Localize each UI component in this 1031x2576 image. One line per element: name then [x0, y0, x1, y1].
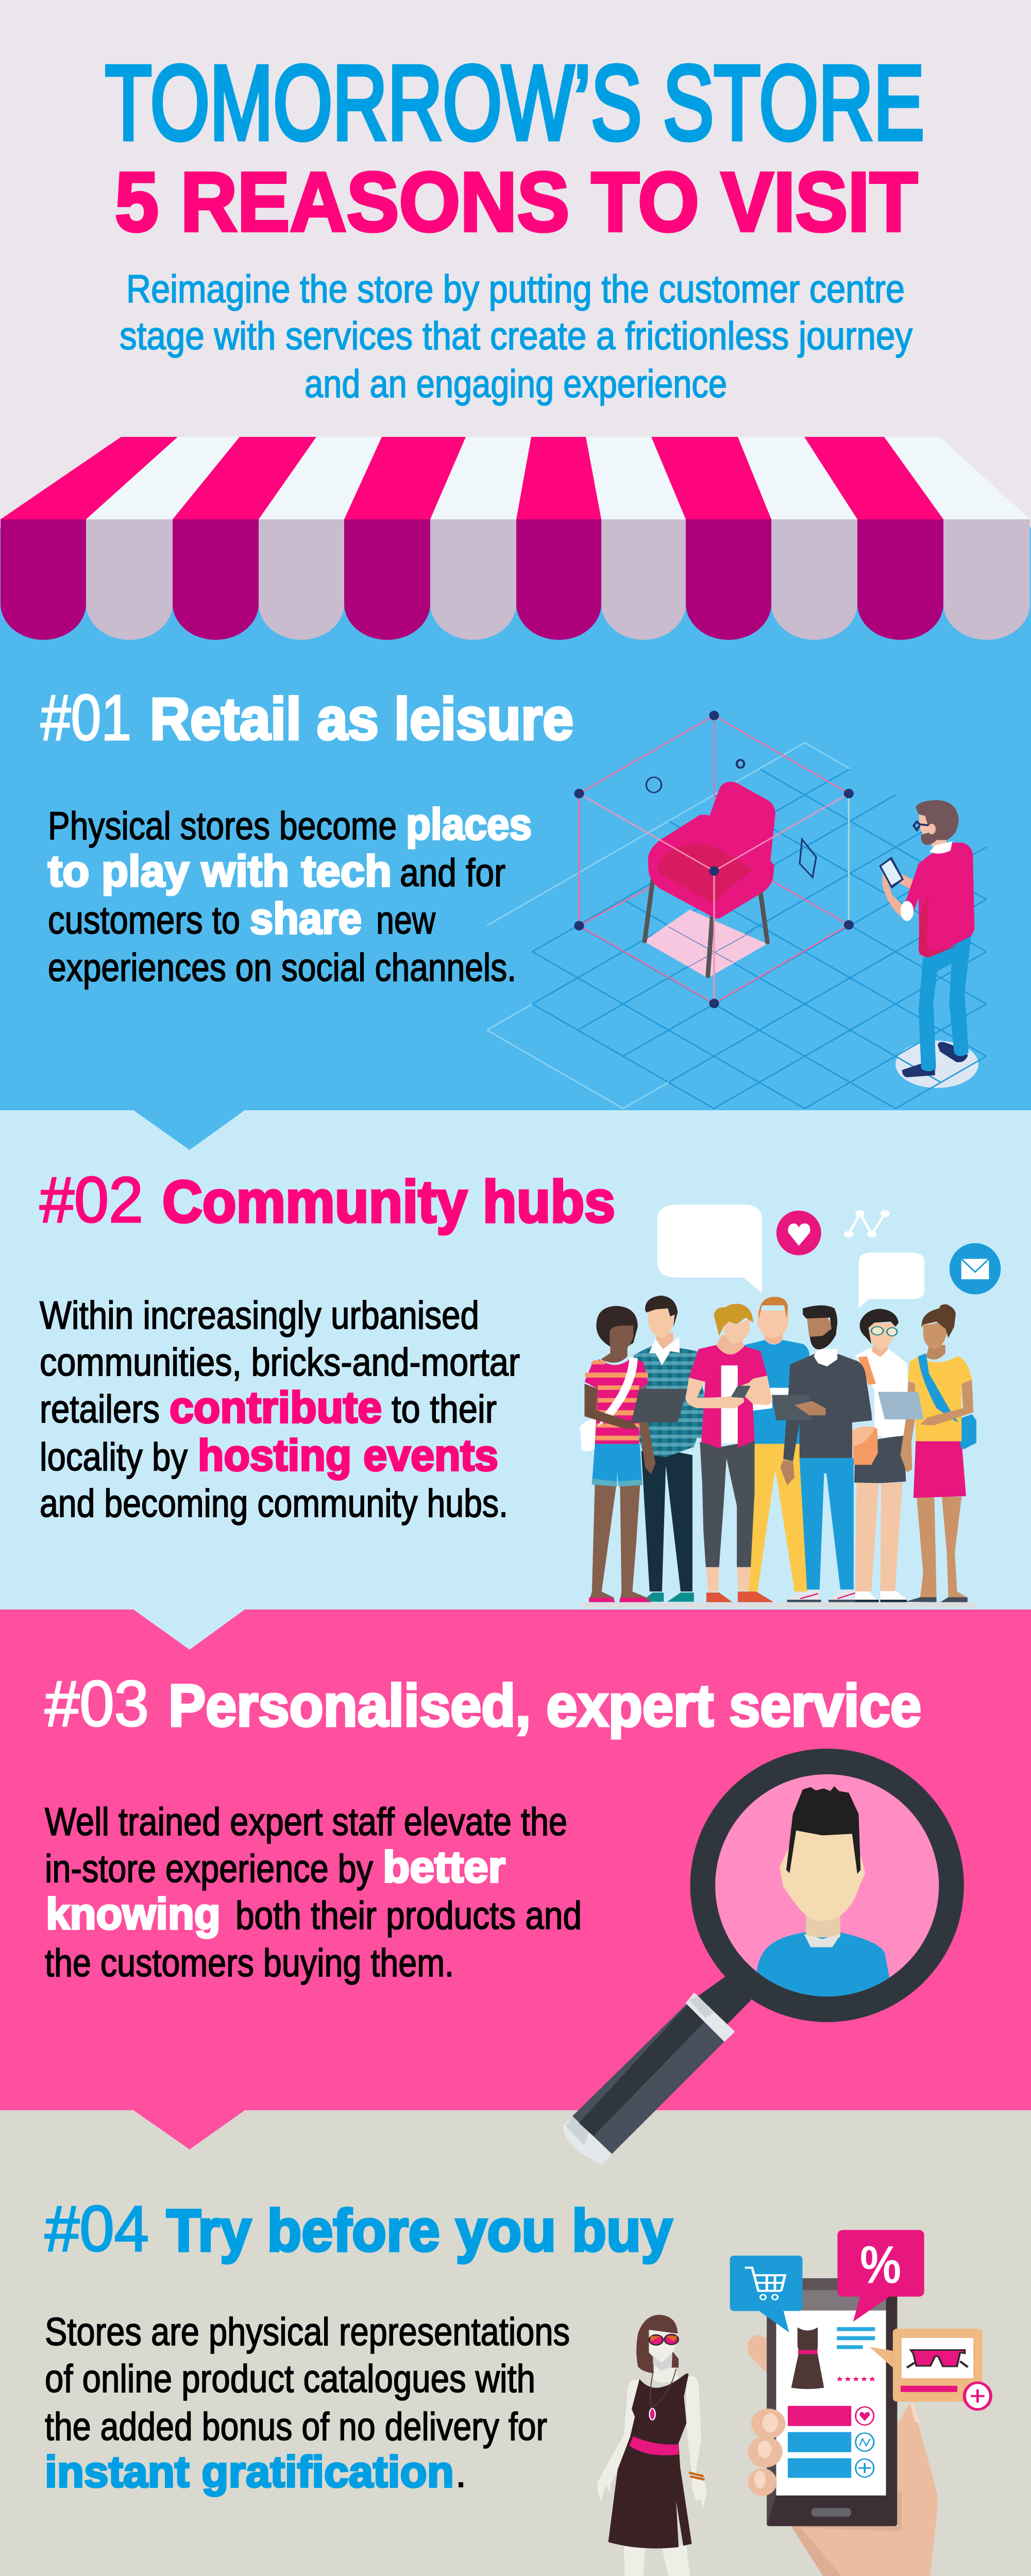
network icon: [846, 1211, 888, 1237]
hand holding phone: [748, 2335, 942, 2576]
subtitle: stage with services that create a frictionless journey: [120, 314, 912, 358]
man with tablet: [879, 800, 974, 1077]
text block: community hubs description: and becoming community hubs.: [40, 1482, 508, 1526]
illustration: magnifying glass over customer: [563, 1749, 964, 2164]
text block: community hubs description: contribute: [170, 1383, 382, 1432]
text block: retail as leisure description: places: [406, 800, 532, 849]
header panel: [0, 0, 1031, 528]
person: man with check shirt: [633, 1296, 706, 1602]
text block: expert service description: better: [383, 1843, 505, 1892]
percent bubble: [837, 2230, 924, 2322]
panel: #02 community hubs: [0, 1110, 1031, 1650]
handle: [563, 1977, 751, 2164]
person: woman with striped top: [580, 1306, 655, 1602]
large speech bubble: [657, 1205, 762, 1293]
heart icon: [776, 1211, 821, 1255]
sunglasses card: [869, 2329, 991, 2410]
text block: try before you buy description: of online product catalogues with: [45, 2357, 535, 2401]
text block: community hubs description: hosting events: [198, 1431, 498, 1480]
text block: retail as leisure description: customers to: [48, 899, 240, 942]
floor grid: [396, 742, 1031, 1187]
illustration: group of people with social icons: [580, 1205, 1001, 1607]
text block: community hubs description: to their: [392, 1387, 497, 1431]
awning: [1, 437, 1030, 640]
mail icon: [950, 1243, 1001, 1294]
wireframe cube front: [579, 793, 849, 1004]
text block: try before you buy description: the added bonus of no delivery for: [45, 2405, 547, 2449]
title line 2: 5 REASONS TO VISIT: [115, 155, 918, 249]
text block: retail as leisure description: experiences on social channels.: [48, 946, 516, 990]
text block: community hubs description: retailers: [40, 1387, 160, 1431]
cart bubble: [730, 2256, 802, 2332]
triangle pointer into section 4: [133, 2110, 245, 2149]
woman in dress: [597, 2315, 707, 2576]
panel: #01 retail as leisure: [0, 528, 1031, 1187]
text block: expert service description: the customers buying them.: [45, 1941, 454, 1985]
text block: retail as leisure description: and for: [400, 851, 505, 895]
subtitle: [120, 267, 912, 406]
fingers: [748, 2409, 786, 2496]
text block: retail as leisure description: Physical stores become: [48, 804, 397, 848]
lens rim: [690, 1749, 964, 2022]
heading: #02 Community hubs: #02: [40, 1164, 143, 1236]
triangle pointer into section 3: [133, 1609, 245, 1650]
heading: #03 Personalised, expert service: Personalised, expert service: [168, 1673, 921, 1739]
text block: retail as leisure description: [48, 800, 532, 990]
text block: try before you buy description: .: [455, 2452, 466, 2496]
awning roof stripes: [1, 437, 1030, 519]
heading: #01 Retail as leisure: #01: [41, 682, 131, 754]
blue tablet: [878, 1392, 924, 1419]
text block: community hubs description: [40, 1294, 520, 1526]
triangle pointer into section 2: [133, 1110, 245, 1150]
text block: expert service description: [45, 1800, 582, 1985]
text block: retail as leisure description: share: [250, 894, 362, 943]
heading: #02 Community hubs: [40, 1164, 615, 1236]
small speech bubble: [858, 1252, 924, 1308]
text block: expert service description: in-store experience by: [45, 1847, 373, 1891]
awning valance scallops: [1, 519, 1030, 640]
text block: expert service description: Well trained expert staff elevate the: [45, 1800, 567, 1844]
text block: expert service description: knowing: [46, 1890, 221, 1939]
heading: #04 Try before you buy: #04: [45, 2193, 149, 2265]
wireframe nodes: [574, 711, 854, 1008]
text block: try before you buy description: Stores are physical representations: [45, 2310, 570, 2354]
heading: #03 Personalised, expert service: #03: [45, 1668, 149, 1740]
lens with person: [711, 1771, 941, 2002]
percent glyph: %: [860, 2235, 901, 2294]
ground shadow: [581, 1603, 976, 1607]
heading: #04 Try before you buy: Try before you buy: [166, 2198, 672, 2264]
panel: #04 try before you buy: [0, 2110, 1031, 2576]
illustration: chair in AR wireframe with man holding tablet: [396, 711, 1031, 1187]
pink floor tile: [644, 910, 767, 978]
heading: #02 Community hubs: Community hubs: [162, 1169, 615, 1235]
text block: retail as leisure description: to play with tech: [48, 847, 392, 896]
laptop: [628, 1389, 687, 1422]
person: bearded man: [772, 1306, 872, 1602]
heading: #01 Retail as leisure: Retail as leisure: [150, 686, 573, 752]
text block: retail as leisure description: new: [376, 899, 436, 942]
subtitle: Reimagine the store by putting the customer centre: [126, 267, 905, 311]
wireframe cube back: [579, 716, 849, 1004]
subtitle: and an engaging experience: [305, 362, 727, 406]
person: woman with glasses and hoodie: [852, 1309, 908, 1602]
heading: #01 Retail as leisure: [41, 682, 573, 754]
person: woman with yellow top: [900, 1304, 976, 1602]
illustration: woman and phone in hand: [597, 2230, 991, 2576]
person: man with yellow trousers: [744, 1297, 809, 1591]
floating circles and shard: [646, 760, 816, 877]
text block: community hubs description: Within increasingly urbanised: [40, 1294, 479, 1337]
text block: expert service description: both their products and: [235, 1894, 582, 1938]
text block: try before you buy description: instant gratification: [45, 2448, 454, 2497]
text block: community hubs description: locality by: [40, 1435, 188, 1479]
phone: [767, 2278, 897, 2526]
text block: community hubs description: communities, bricks-and-mortar: [40, 1341, 520, 1384]
floor ellipse under man: [895, 1041, 978, 1088]
panel: #03 personalised expert service: [0, 1609, 1031, 2164]
person: woman with pink cardigan: [686, 1304, 774, 1602]
text block: try before you buy description: [45, 2310, 570, 2497]
chair: [645, 782, 775, 976]
